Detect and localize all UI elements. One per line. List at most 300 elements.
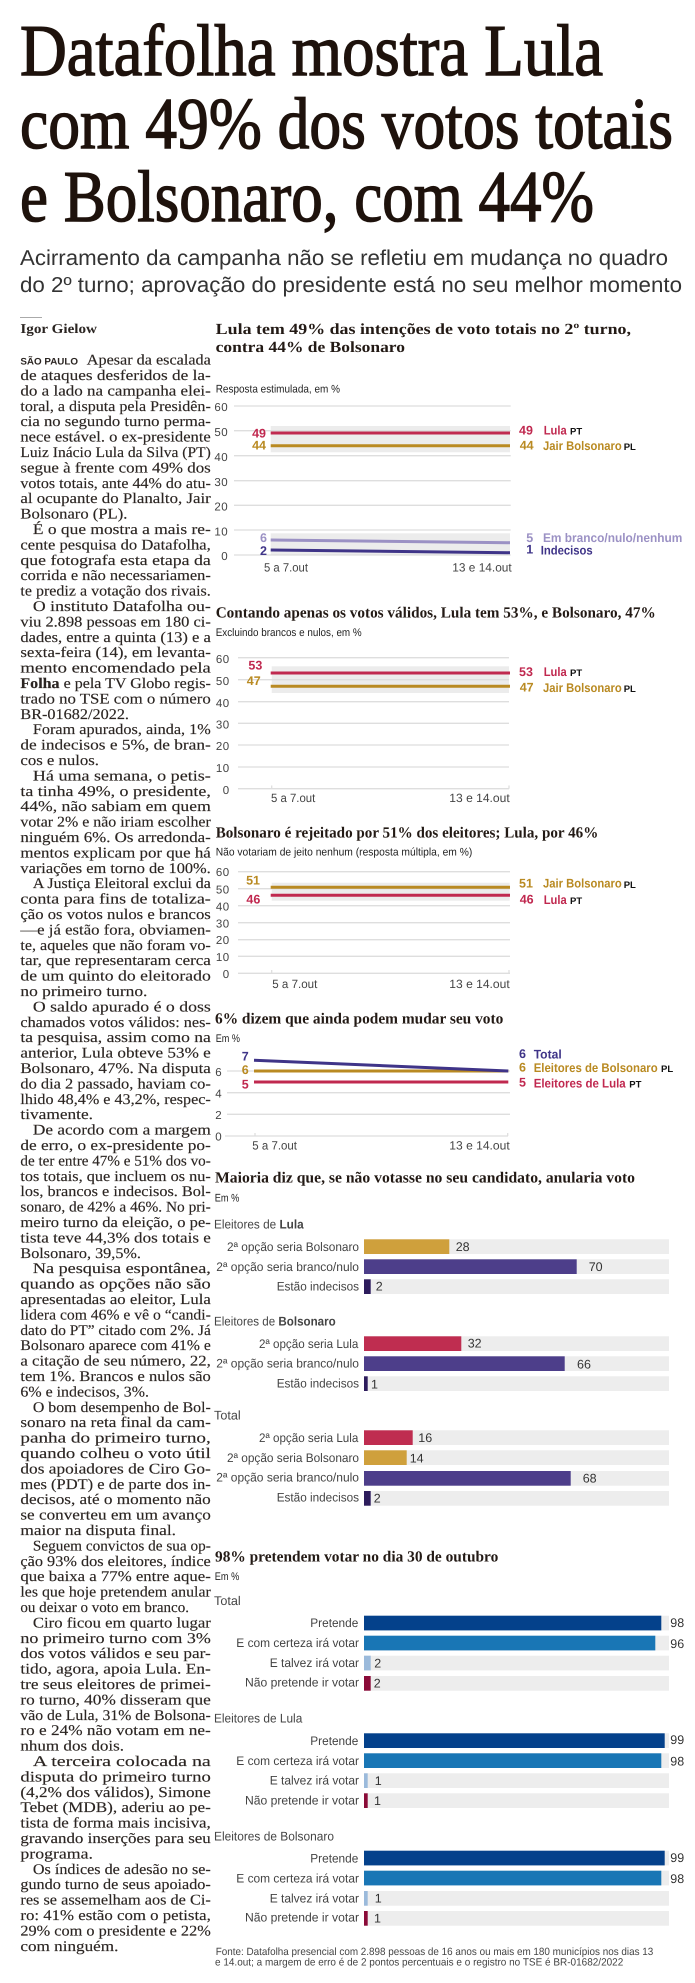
bar: Não pretende ir votar 2: 2	[374, 1676, 381, 1690]
paragraph 4	[20, 722, 211, 769]
bar: E com certeza irá votar 96: E com certeza irá votar	[236, 1636, 359, 1650]
right legend labels: PT	[570, 896, 582, 907]
paragraph 5: ninguém 6%. Os arredonda-	[20, 830, 211, 846]
bar: 2ª opção seria Bolsonaro 14	[227, 1450, 669, 1466]
paragraph 6: ção os votos nulos e brancos	[20, 907, 211, 923]
paragraph 8	[20, 1123, 211, 1262]
bar: 2ª opção seria Lula 16: 16	[418, 1431, 432, 1445]
bar: Não pretende ir votar 1: 1	[374, 1794, 381, 1808]
right legend labels: Eleitores de Lula	[534, 1076, 627, 1090]
x axis labels	[272, 977, 510, 991]
left value labels	[252, 426, 267, 558]
paragraph 8: tista teve 44,3% dos totais e	[20, 1230, 211, 1246]
y axis and grid	[214, 402, 511, 563]
bar: Pretende 99	[310, 1851, 684, 1865]
paragraph 10	[20, 1400, 211, 1539]
paragraph 1: votos totais, ante 44% do atu-	[20, 476, 211, 492]
right legend labels: Total	[534, 1048, 562, 1062]
bar: E talvez irá votar 2: E talvez irá votar	[270, 1656, 359, 1670]
x axis labels: 5 a 7.out	[272, 977, 318, 991]
article body text column	[19, 353, 211, 1955]
paragraph 14	[20, 1862, 211, 1955]
right legend labels: Jair Bolsonaro	[543, 439, 622, 453]
panel: bar chart, intention to vote	[214, 1549, 684, 1926]
paragraph 9: Bolsonaro aparece com 41% e	[20, 1338, 211, 1354]
subtitle: Acirramento da campanha não se refletiu em mudança no quadro	[20, 246, 668, 270]
right legend labels: 44	[520, 438, 534, 452]
bar: Estão indecisos 2: Estão indecisos	[277, 1280, 359, 1294]
paragraph 14: com ninguém.	[20, 1939, 118, 1955]
right legend labels	[519, 665, 636, 695]
y axis and grid: 40	[216, 902, 230, 914]
paragraph 9: 6% e indecisos, 3%.	[20, 1384, 149, 1400]
left value labels: 6	[260, 531, 267, 545]
paragraph 10: dos apoiadores de Ciro Go-	[20, 1461, 211, 1477]
chart note: Em %	[215, 1571, 239, 1583]
paragraph 11	[20, 1538, 211, 1616]
bar: 2ª opção seria branco/nulo 66: 66	[577, 1357, 591, 1371]
y axis and grid	[216, 654, 509, 797]
y axis and grid: 4	[215, 1088, 222, 1100]
paragraph 10: mes (PDT) e de parte dos in-	[20, 1477, 211, 1493]
paragraph 3: O instituto Datafolha ou-	[33, 599, 211, 615]
right legend labels: PL	[624, 442, 636, 453]
bar: 2ª opção seria Lula 32: 2ª opção seria Lula	[259, 1337, 358, 1351]
paragraph 8: meiro turno da eleição, o pe-	[20, 1215, 211, 1231]
paragraph 9: tem 1%. Brancos e nulos são	[20, 1369, 211, 1385]
right legend labels: Lula	[544, 665, 568, 679]
paragraph 7: Bolsonaro, 47%. Na disputa	[20, 1061, 211, 1077]
paragraph 7: do dia 2 passado, haviam co-	[20, 1076, 211, 1092]
left value labels: 53	[248, 659, 262, 673]
line: Bolsonaro voters	[254, 1070, 508, 1072]
y axis and grid: 50	[216, 884, 230, 896]
bar: 2ª opção seria Lula 32: 32	[468, 1337, 482, 1351]
panel: line chart, may change vote	[215, 1010, 673, 1152]
right legend labels: 53	[519, 665, 533, 679]
right legend labels: Lula	[544, 893, 568, 907]
paragraph 6	[19, 876, 211, 1000]
paragraph 2: cente pesquisa do Datafolha,	[20, 537, 211, 553]
paragraph 7: O saldo apurado é o doss	[33, 999, 211, 1015]
paragraph 3: viu 2.898 pessoas em 180 ci-	[20, 614, 211, 630]
bar: E talvez irá votar 2: 2	[374, 1656, 381, 1670]
bar: Pretende 99	[310, 1733, 684, 1748]
bar: Pretende 98: 98	[670, 1616, 684, 1630]
right legend labels: 51	[519, 877, 533, 891]
paragraph 8: de erro, o ex-presidente po-	[20, 1138, 211, 1154]
paragraph 7	[20, 999, 211, 1123]
paragraph 1: do a lado na campanha elei-	[20, 383, 211, 399]
paragraph 10: sonaro na reta final da cam-	[20, 1415, 211, 1431]
chart heading: Contando apenas os votos válidos, Lula tem 53%, e Bolsonaro, 47%	[216, 605, 656, 622]
bar: 2ª opção seria branco/nulo 70	[216, 1259, 669, 1274]
left value labels	[242, 1050, 249, 1092]
subtitle: do 2º turno; aprovação do presidente está no seu melhor momento	[20, 273, 682, 297]
paragraph 1: Apesar da escalada	[87, 353, 211, 369]
paragraph 13: tista de forma mais incisiva,	[20, 1816, 211, 1832]
paragraph 14: 29% com o presidente e 22%	[20, 1923, 211, 1939]
source note	[215, 1946, 653, 1969]
left value labels	[247, 659, 262, 688]
paragraph 3: dades, entre a quinta (13) e a	[20, 630, 211, 646]
paragraph 11: ou deixar o voto em branco.	[20, 1600, 189, 1616]
paragraph 8: sonaro, de 42% a 46%. No pri-	[20, 1200, 211, 1216]
line: Bolsonaro	[271, 685, 510, 688]
paragraph 5: mentos explicam por que há	[20, 845, 211, 861]
chart heading: Maioria diz que, se não votasse no seu candidato, anularia voto	[215, 1170, 635, 1187]
paragraph 1: al ocupante do Planalto, Jair	[20, 491, 211, 507]
right legend labels: PL	[624, 684, 636, 695]
bar: 2ª opção seria Lula 32	[259, 1336, 669, 1351]
paragraph 12	[20, 1615, 211, 1755]
paragraph 9: Na pesquisa espontânea,	[33, 1261, 211, 1277]
group: total	[214, 1594, 684, 1691]
bar: E talvez irá votar 2	[270, 1656, 669, 1670]
bar: Estão indecisos 2: Estão indecisos	[277, 1491, 359, 1505]
paragraph 2: É o que mostra a mais re-	[33, 521, 211, 538]
right legend labels: Indecisos	[541, 543, 593, 557]
bar: E talvez irá votar 1	[270, 1773, 669, 1788]
right legend labels	[519, 877, 636, 907]
chart heading	[216, 321, 631, 356]
group: Bolsonaro voters: Eleitores de Bolsonaro	[214, 1314, 336, 1328]
paragraph 5: Há uma semana, o petis-	[33, 768, 211, 784]
paragraph 1: Bolsonaro (PL).	[20, 507, 127, 523]
chart note: Resposta estimulada, em %	[216, 384, 340, 396]
paragraph 5: votar 2% e não iriam escolher	[20, 815, 211, 831]
paragraph 12: Ciro ficou em quarto lugar	[33, 1615, 211, 1631]
y axis and grid: 20	[216, 741, 230, 753]
chart heading: 98% pretendem votar no dia 30 de outubro	[215, 1549, 499, 1566]
chart heading: Lula tem 49% das intenções de voto totais no 2º turno,	[216, 321, 631, 338]
paragraph 12: nhum dos dois.	[20, 1739, 124, 1755]
paragraph 12: tido, agora, apoia Lula. En-	[20, 1662, 211, 1678]
bar: E talvez irá votar 1: 1	[375, 1891, 382, 1905]
paragraph 7: ta pesquisa, assim como na	[20, 1030, 211, 1046]
y axis and grid: 30	[216, 918, 230, 930]
bar: E com certeza irá votar 98: E com certeza irá votar	[236, 1871, 359, 1885]
x axis labels: 5 a 7.out	[264, 560, 309, 574]
y axis and grid: 40	[216, 698, 230, 710]
paragraph 2: corrida e não necessariamen-	[20, 568, 211, 584]
paragraph 7: lhido 48,4% e 43,2%, respec-	[20, 1092, 211, 1108]
y axis and grid: 60	[214, 402, 228, 414]
bar: 2ª opção seria branco/nulo 66	[216, 1356, 669, 1371]
bar: Estão indecisos 2	[277, 1279, 669, 1294]
bar: Não pretende ir votar 1: 1	[374, 1911, 381, 1925]
line: Bolsonaro	[271, 444, 510, 447]
y axis and grid: 10	[216, 763, 230, 775]
bar: E com certeza irá votar 98: 98	[670, 1755, 684, 1769]
group: Bolsonaro voters: Eleitores de Bolsonaro	[214, 1829, 334, 1843]
panel: line chart, rejection	[216, 825, 636, 991]
x axis labels	[252, 1138, 510, 1152]
chart note: Em %	[215, 1192, 239, 1204]
panel: bar chart, second option	[214, 1170, 669, 1506]
source note: e 14.out; a margem de erro é de 2 pontos percentuais e o registro no TSE é BR-01682/2022	[215, 1957, 623, 1969]
paragraph 1: toral, a disputa pela Presidên-	[20, 399, 211, 415]
paragraph 3	[20, 599, 211, 723]
group: Lula voters: Eleitores de Lula	[214, 1711, 302, 1725]
chart note: Excluindo brancos e nulos, em %	[216, 627, 362, 639]
bar: Estão indecisos 1	[277, 1376, 669, 1391]
right legend labels: Eleitores de Bolsonaro	[534, 1061, 658, 1075]
bar: Não pretende ir votar 2	[245, 1676, 669, 1691]
right legend labels: 1	[526, 542, 533, 556]
paragraph 6: de um quinto do eleitorado	[20, 969, 211, 985]
subtitle	[20, 246, 682, 297]
paragraph 10: decisos, até o momento não	[20, 1492, 211, 1508]
bar: Não pretende ir votar 1: Não pretende ir votar	[245, 1793, 359, 1807]
bar: 2ª opção seria branco/nulo 70: 2ª opção seria branco/nulo	[216, 1260, 359, 1274]
bar: Estão indecisos 1: 1	[371, 1377, 378, 1391]
paragraph 8: De acordo com a margem	[33, 1123, 211, 1139]
bar: 2ª opção seria Bolsonaro 28: 28	[456, 1240, 470, 1254]
bar: 2ª opção seria Bolsonaro 14: 14	[410, 1452, 424, 1466]
paragraph 1: Luiz Inácio Lula da Silva (PT)	[20, 445, 211, 461]
left value labels: 6	[242, 1063, 249, 1077]
paragraph 1	[20, 353, 211, 523]
paragraph 3: trado no TSE com o número	[20, 691, 211, 707]
x axis labels: 13 e 14.out	[449, 791, 510, 805]
left value labels: 47	[247, 674, 261, 688]
paragraph 12: dos votos válidos e seu par-	[20, 1646, 211, 1662]
paragraph 6: no primeiro turno.	[20, 984, 147, 1000]
paragraph 12: tre seus eleitores de primei-	[20, 1677, 211, 1693]
y axis and grid: 2	[215, 1110, 222, 1122]
byline	[20, 317, 97, 336]
paragraph 7: anterior, Lula obteve 53% e	[20, 1046, 211, 1062]
y axis and grid	[215, 1067, 510, 1144]
bar: E com certeza irá votar 96: 96	[670, 1637, 684, 1651]
y axis and grid: 10	[216, 952, 230, 964]
paragraph 4: de indecisos e 5%, de bran-	[20, 738, 211, 754]
paragraph 14: Os índices de adesão no se-	[33, 1862, 211, 1878]
y axis and grid: 50	[214, 427, 228, 439]
paragraph 9: dato do PT” citado com 2%. Já	[20, 1323, 211, 1339]
right legend labels: PL	[624, 880, 636, 891]
right legend labels: 6	[519, 1047, 526, 1061]
line: Bolsonaro	[271, 886, 510, 889]
paragraph 12: vão de Lula, 31% de Bolsona-	[20, 1708, 211, 1724]
right legend labels: 5	[526, 531, 533, 545]
paragraph 11: que baixa a 77% entre aque-	[20, 1569, 211, 1585]
left value labels	[246, 874, 260, 906]
paragraph 13: (4,2% dos válidos), Simone	[20, 1785, 211, 1801]
y axis and grid	[216, 867, 510, 981]
paragraph 8: tos totais, que incluem os nu-	[20, 1169, 211, 1185]
y axis and grid: 0	[221, 551, 228, 563]
bar: Pretende 99: Pretende	[310, 1734, 358, 1748]
paragraph 6: conta para fins de totaliza-	[20, 892, 211, 908]
paragraph 5: ta tinha 49%, o presidente,	[20, 784, 211, 800]
bar: Pretende 99: 99	[670, 1851, 684, 1865]
paragraph 3: Folha e pela TV Globo regis-	[20, 676, 211, 692]
left value labels: 5	[242, 1078, 249, 1092]
paragraph 1: segue à frente com 49% dos	[20, 460, 211, 476]
paragraph 8: Bolsonaro, 39,5%.	[20, 1246, 141, 1262]
paragraph 10: quando colheu o voto útil	[20, 1446, 211, 1462]
paragraph 14: res se assemelham aos de Ci-	[20, 1893, 211, 1909]
y axis and grid: 30	[214, 477, 228, 489]
paragraph 3: sexta-feira (14), em levanta-	[20, 645, 211, 661]
right legend labels	[519, 1047, 673, 1090]
paragraph 3: mento encomendado pela	[20, 661, 211, 677]
bar: E com certeza irá votar 98: E com certeza irá votar	[236, 1754, 359, 1768]
paragraph 9: lidera com 46% e vê o “candi-	[20, 1307, 211, 1323]
y axis and grid: 60	[216, 867, 230, 879]
paragraph 5	[20, 768, 211, 877]
right legend labels: 6	[519, 1060, 526, 1074]
chart heading: 6% dizem que ainda podem mudar seu voto	[215, 1010, 504, 1027]
bar: E com certeza irá votar 98	[236, 1871, 684, 1886]
bar: Estão indecisos 1: Estão indecisos	[277, 1377, 359, 1391]
y axis and grid: 20	[214, 502, 228, 514]
chart note: Em %	[216, 1033, 240, 1045]
bar: Pretende 98: Pretende	[310, 1616, 358, 1630]
paragraph 13: gravando inserções para seu	[20, 1831, 211, 1847]
paragraph 6: tar, que representaram cerca	[20, 953, 211, 969]
group: total: Total	[214, 1408, 241, 1422]
y axis and grid: 40	[214, 452, 228, 464]
bar: E talvez irá votar 1: E talvez irá votar	[270, 1773, 359, 1787]
paragraph 14: gundo turno de seus apoiado-	[20, 1877, 211, 1893]
x axis labels	[271, 791, 510, 805]
x axis labels: 13 e 14.out	[449, 1138, 510, 1152]
right legend labels: 47	[520, 680, 534, 694]
chart heading: contra 44% de Bolsonaro	[216, 339, 405, 356]
paragraph 1: de ataques desferidos de la-	[20, 368, 211, 384]
y axis and grid: 20	[216, 935, 230, 947]
right legend labels: Jair Bolsonaro	[543, 877, 622, 891]
paragraph 6: —e já estão fora, obviamen-	[19, 922, 211, 938]
bar: 2ª opção seria branco/nulo 70: 70	[589, 1260, 603, 1274]
paragraph 9: quando as opções não são	[20, 1277, 211, 1293]
paragraph 6: te, aqueles que não foram vo-	[20, 938, 211, 954]
paragraph 1: SÃO PAULO	[20, 356, 78, 368]
line: Lula	[271, 432, 510, 434]
paragraph 10: panha do primeiro turno,	[20, 1431, 211, 1447]
margin of error bands	[271, 426, 510, 555]
left value labels: 51	[246, 874, 260, 888]
paragraph 3: BR-01682/2022.	[20, 707, 129, 723]
bar: 2ª opção seria Bolsonaro 14: 2ª opção seria Bolsonaro	[227, 1451, 359, 1465]
bar: Pretende 99: Pretende	[310, 1851, 358, 1865]
bar: Não pretende ir votar 1	[245, 1911, 669, 1926]
group: Bolsonaro voters	[214, 1314, 669, 1391]
bar: E talvez irá votar 1: 1	[375, 1774, 382, 1788]
paragraph 12: ro turno, 40% disseram que	[20, 1692, 211, 1708]
title	[20, 10, 673, 237]
right legend labels: PL	[661, 1064, 673, 1075]
margin of error band	[272, 883, 510, 901]
line: total	[254, 1060, 508, 1071]
paragraph 1: nece estável. o ex-presidente	[20, 430, 211, 446]
line: Lula	[271, 894, 510, 897]
paragraph 7: tivamente.	[20, 1107, 93, 1123]
y axis and grid: 50	[216, 676, 230, 688]
paragraph 2: te prediz a votação dos rivais.	[20, 584, 211, 600]
paragraph 11: ção 93% dos eleitores, índice	[20, 1554, 211, 1570]
paragraph 10: se converteu em um avanço	[20, 1508, 211, 1524]
line: Lula	[271, 672, 510, 674]
chart heading: Bolsonaro é rejeitado por 51% dos eleitores; Lula, por 46%	[216, 825, 598, 842]
left value labels: 7	[242, 1050, 249, 1064]
title: e Bolsonaro, com 44%	[20, 156, 594, 237]
bar: E talvez irá votar 1: E talvez irá votar	[270, 1891, 359, 1905]
y axis and grid: 60	[216, 654, 230, 666]
paragraph 11: Seguem convictos de sua op-	[33, 1538, 211, 1554]
paragraph 4: Foram apurados, ainda, 1%	[33, 722, 211, 738]
paragraph 10: O bom desempenho de Bol-	[33, 1400, 211, 1416]
line: branco/nulo	[271, 540, 510, 543]
bar: 2ª opção seria Bolsonaro 28: 2ª opção seria Bolsonaro	[227, 1240, 359, 1254]
bar: Não pretende ir votar 2: Não pretende ir votar	[245, 1676, 359, 1690]
panel: line chart, valid votes	[216, 605, 656, 805]
paragraph 5: 44%, não sabiam em quem	[20, 799, 211, 815]
right legend labels: PT	[570, 668, 582, 679]
paragraph 13: disputa do primeiro turno	[20, 1769, 211, 1785]
right legend labels: PT	[629, 1079, 642, 1090]
paragraph 6: A Justiça Eleitoral exclui da	[33, 876, 211, 892]
paragraph 12: ro e 24% não votam em ne-	[20, 1723, 211, 1739]
bar: E com certeza irá votar 98	[236, 1753, 684, 1769]
right legend labels: 5	[519, 1076, 526, 1090]
bar: 2ª opção seria Bolsonaro 28	[227, 1239, 669, 1254]
bar: Estão indecisos 2: 2	[376, 1280, 383, 1294]
bar: Não pretende ir votar 1: Não pretende ir votar	[245, 1911, 359, 1925]
paragraph 7: chamados votos válidos: nes-	[20, 1015, 211, 1031]
title: Datafolha mostra Lula	[20, 10, 603, 91]
line: Lula voters	[254, 1080, 508, 1084]
paragraph 2: que fotografa esta etapa da	[20, 553, 211, 569]
paragraph 13: Tebet (MDB), aderiu ao pe-	[20, 1800, 211, 1816]
panel: line chart, total vote intention	[214, 321, 682, 574]
right legend labels: PT	[570, 427, 582, 438]
y axis and grid: 0	[223, 969, 230, 981]
paragraph 14: ro: 41% estão com o petista,	[20, 1908, 211, 1924]
left value labels: 44	[252, 439, 266, 453]
right legend labels: 46	[520, 892, 534, 906]
bar: 2ª opção seria branco/nulo 68: 2ª opção seria branco/nulo	[216, 1471, 359, 1485]
bar: 2ª opção seria branco/nulo 68: 68	[583, 1471, 597, 1485]
bar: Não pretende ir votar 1	[245, 1793, 669, 1808]
bar: E com certeza irá votar 98: 98	[670, 1872, 684, 1886]
x axis labels	[264, 560, 512, 574]
bar: 2ª opção seria branco/nulo 66: 2ª opção seria branco/nulo	[216, 1356, 359, 1370]
y axis and grid: 0	[223, 785, 230, 797]
paragraph 10: maior na disputa final.	[20, 1523, 176, 1539]
paragraph 13: A terceira colocada na	[33, 1754, 211, 1770]
byline: Igor Gielow	[20, 321, 97, 336]
right legend labels	[519, 423, 682, 557]
bar: 2ª opção seria branco/nulo 68	[216, 1471, 669, 1486]
paragraph 4: cos e nulos.	[20, 753, 99, 769]
bar: E com certeza irá votar 96	[236, 1636, 684, 1651]
x axis labels: 13 e 14.out	[449, 977, 510, 991]
bar: 2ª opção seria Lula 16	[259, 1430, 669, 1445]
right legend labels: Em branco/nulo/nenhum	[543, 531, 682, 545]
x axis labels: 5 a 7.out	[252, 1138, 298, 1152]
paragraph 9	[20, 1261, 211, 1400]
left value labels: 2	[260, 544, 267, 558]
group: total	[214, 1408, 669, 1506]
group: Bolsonaro voters	[214, 1829, 684, 1926]
chart note: Não votariam de jeito nenhum (resposta múltipla, em %)	[216, 847, 472, 859]
right legend labels: 49	[519, 423, 533, 437]
bar: Pretende 99: 99	[670, 1733, 684, 1747]
